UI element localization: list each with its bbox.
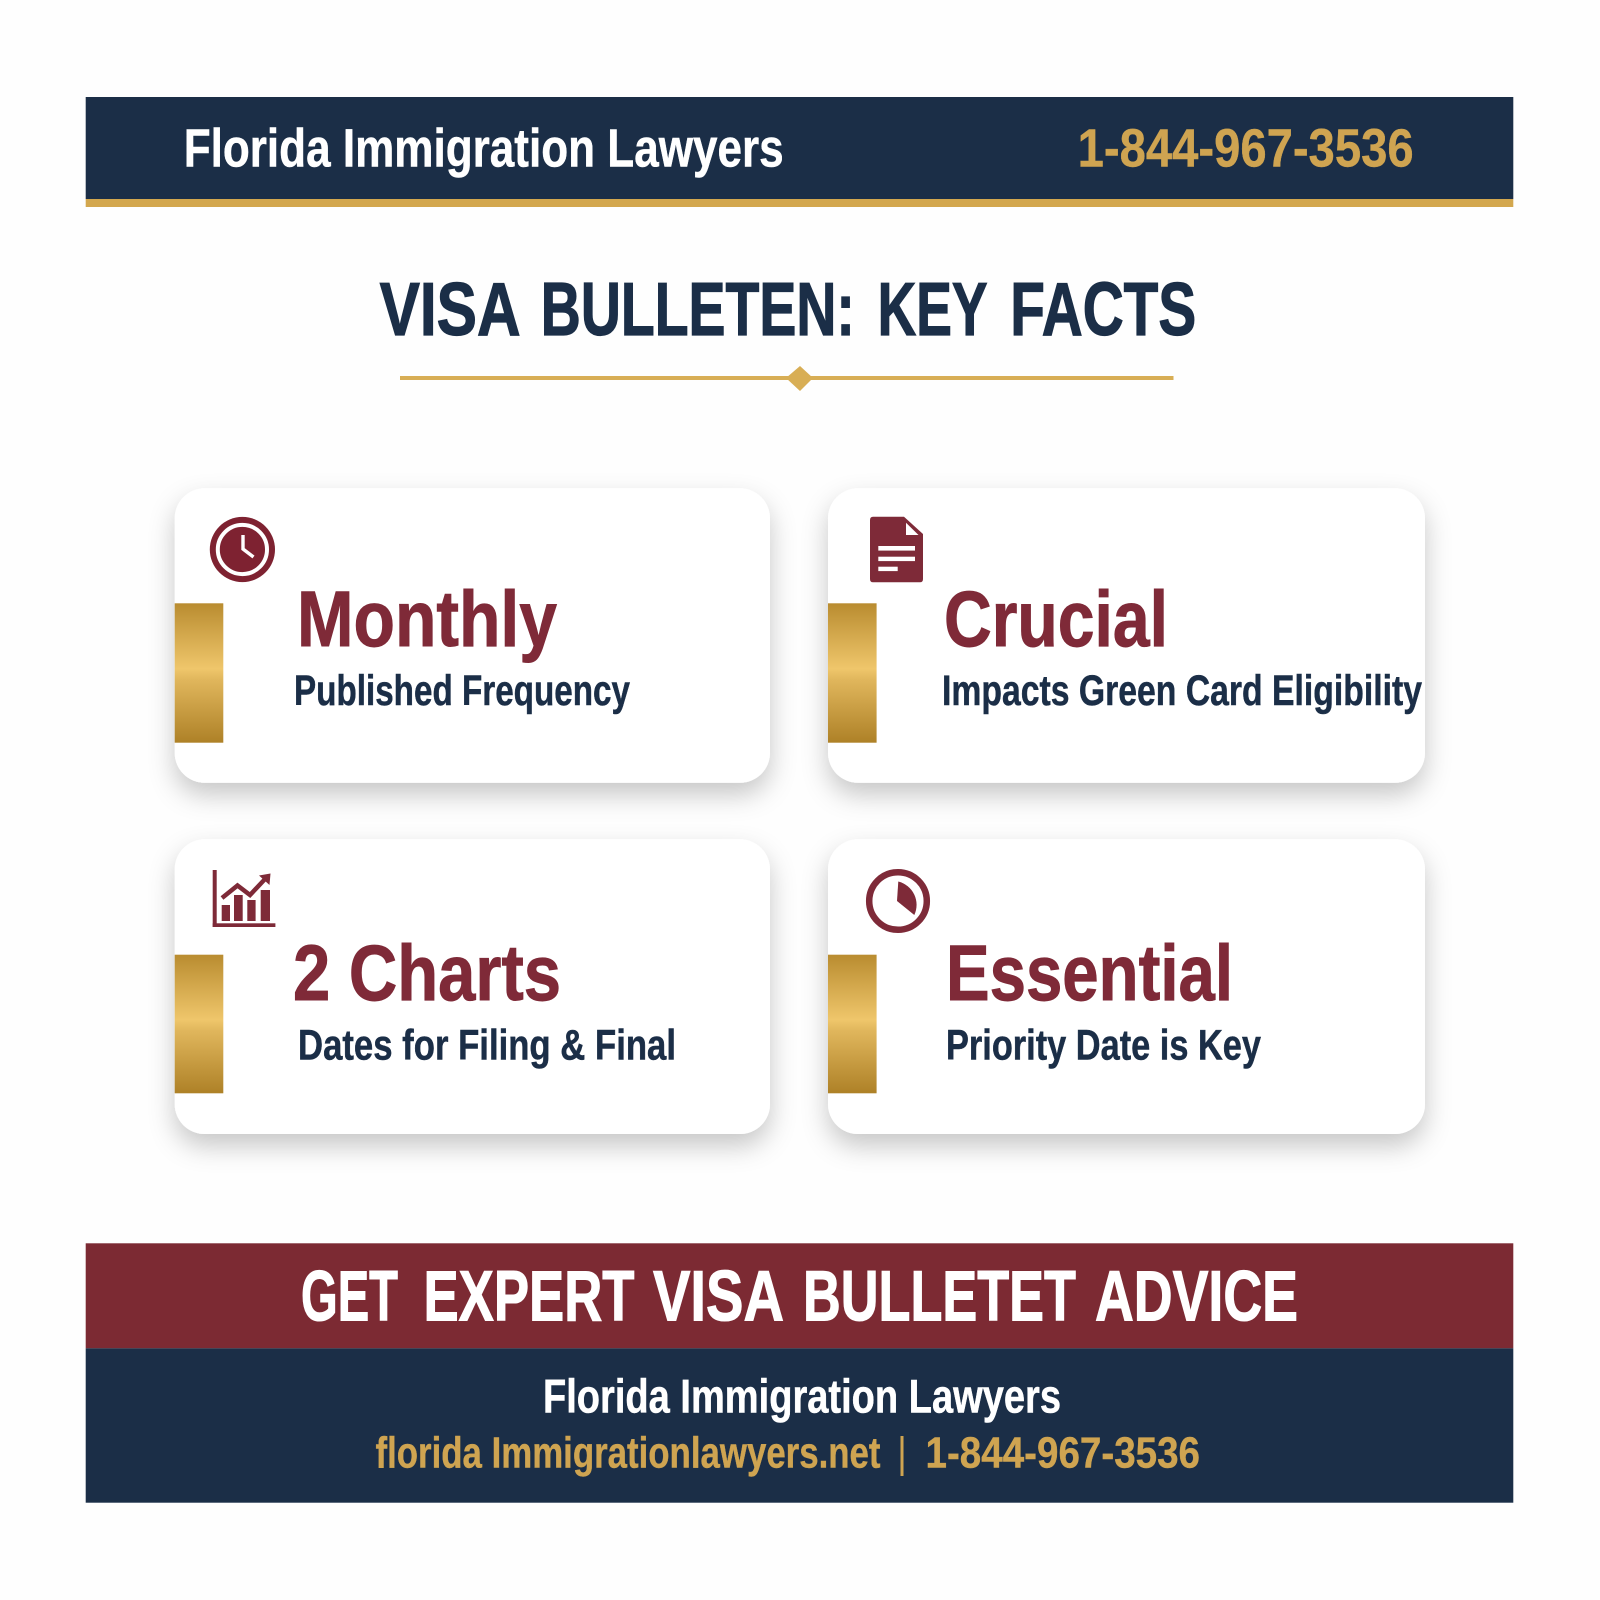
card label: Impacts Green Card Eligibility <box>942 667 1422 715</box>
card value: Crucial <box>944 574 1168 663</box>
card: 2 Charts <box>175 839 770 1134</box>
footer website and phone: 1-844-967-3536 <box>926 1428 1200 1477</box>
card: Crucial <box>828 488 1425 783</box>
icon: chart <box>213 870 275 927</box>
card label: Dates for Filing & Final <box>298 1021 676 1069</box>
icon: document <box>870 517 923 582</box>
banner headline: GET <box>301 1258 398 1337</box>
banner headline: VISA <box>653 1258 784 1337</box>
call-to-action banner <box>86 1243 1513 1348</box>
banner headline: ADVICE <box>1095 1258 1298 1337</box>
main title <box>380 267 1196 351</box>
main title: KEY <box>878 267 988 351</box>
banner headline <box>301 1258 1298 1337</box>
card value: Monthly <box>297 574 557 663</box>
footer website and phone: florida Immigrationlawyers.net <box>376 1428 881 1477</box>
card value: 2 Charts <box>293 928 561 1017</box>
banner headline: EXPERT <box>424 1258 634 1337</box>
banner headline: BULLETET <box>803 1258 1076 1337</box>
icon: clock <box>210 517 275 582</box>
header firm name: Florida Immigration Lawyers <box>184 119 784 179</box>
title divider with diamond <box>400 366 1174 391</box>
header phone number: 1-844-967-3536 <box>1078 119 1414 179</box>
card label: Published Frequency <box>294 667 630 715</box>
card: Essential <box>828 839 1425 1134</box>
top header bar <box>86 97 1513 207</box>
footer firm name: Florida Immigration Lawyers <box>543 1370 1061 1423</box>
main title: VISA <box>380 267 521 351</box>
main title: FACTS <box>1010 267 1196 351</box>
icon: priority clock <box>869 872 927 930</box>
card: Monthly <box>175 488 770 783</box>
card label: Priority Date is Key <box>946 1021 1261 1069</box>
card value: Essential <box>946 928 1233 1017</box>
main title: BULLETEN: <box>541 267 855 351</box>
contact footer <box>86 1348 1513 1503</box>
